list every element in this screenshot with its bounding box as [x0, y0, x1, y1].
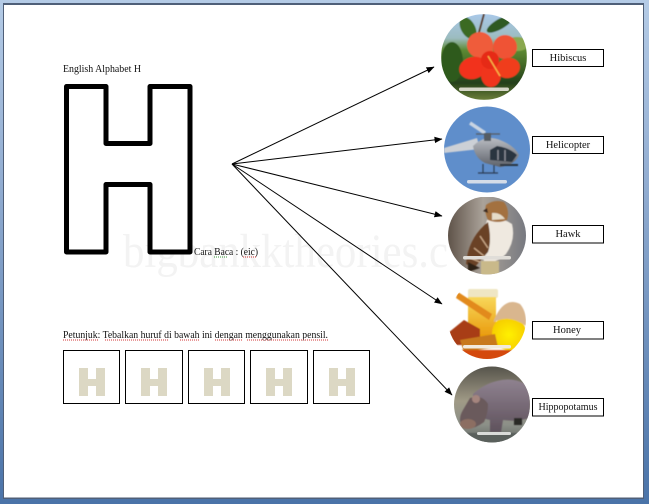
label: Hawk: Hawk	[555, 229, 581, 240]
label: Honey: Honey	[553, 325, 582, 336]
practice box 1	[64, 350, 120, 404]
label: Helicopter: Helicopter	[546, 140, 591, 151]
label: Honey	[532, 322, 604, 339]
practice box 5	[314, 350, 370, 404]
label: Hibiscus: Hibiscus	[550, 53, 586, 64]
pronunciation text: Cara Baca : (eic)	[194, 247, 258, 258]
watermark: bigbankktheories.c	[123, 225, 448, 278]
picture: honey	[448, 289, 526, 362]
picture: helicopter	[444, 106, 530, 194]
label: Hibiscus	[532, 50, 604, 66]
picture: hibiscus	[441, 12, 529, 100]
label: Hippopotamus	[532, 398, 604, 416]
practice box 4	[250, 350, 308, 404]
outline letter H	[66, 86, 190, 252]
picture: hawk	[448, 197, 526, 275]
practice boxes	[64, 350, 370, 404]
heading: English Alphabet H: English Alphabet H	[63, 64, 141, 75]
practice box 3	[188, 350, 244, 404]
arrows from letter to pictures	[232, 67, 452, 395]
instructions text: Petunjuk: Tebalkan huruf di bawah ini dengan menggunakan pensil.	[63, 330, 328, 341]
label: Helicopter	[532, 136, 604, 154]
picture: hippopotamus	[454, 366, 530, 444]
practice box 2	[126, 350, 182, 404]
label: Hawk	[532, 226, 604, 243]
label: Hippopotamus: Hippopotamus	[538, 402, 598, 413]
